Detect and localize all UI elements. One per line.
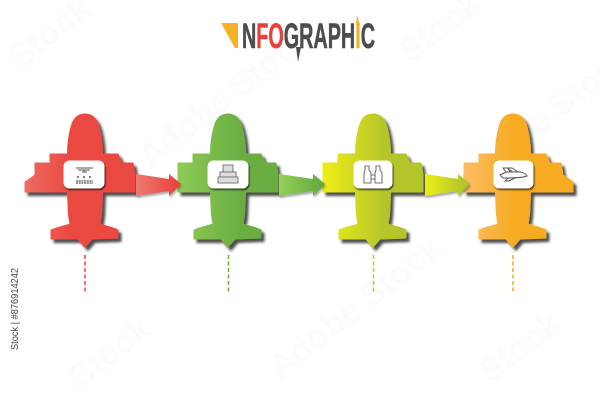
icon: crane and boxes: [76, 168, 93, 183]
dashed leader line: [512, 255, 514, 292]
icon: stacked boxes: [218, 165, 238, 183]
icon card: [354, 160, 392, 188]
stock image number: Stock | #876914242: [10, 268, 21, 350]
icon card: [494, 160, 534, 188]
plane body: [25, 114, 135, 247]
icon card: [208, 160, 248, 188]
watermark: Stock: [62, 309, 158, 396]
logo mark: yellow wedge forming the letter I: [221, 23, 238, 48]
dashed leader line: [228, 255, 230, 293]
title: INFOGRAPHIC logo: [221, 15, 375, 62]
logo text: NFOGRAPHIC: [242, 17, 375, 56]
plane 3: yellow-green: [323, 114, 423, 293]
watermark: Adobe Stock: [262, 228, 449, 386]
dashed leader line: [84, 255, 86, 293]
icon card: [64, 160, 104, 188]
plane body: [464, 114, 573, 247]
watermark: Stock: [472, 304, 568, 391]
R spike: [296, 47, 301, 62]
watermark: Adobe Stock: [132, 18, 319, 176]
arrow 3: yellow to orange: [425, 174, 470, 196]
plane 4: orange: [464, 114, 573, 292]
plane 1: red: [25, 114, 135, 293]
plane 2: green: [178, 114, 278, 293]
arrow 1: red to green: [136, 174, 181, 196]
icon: binoculars: [364, 166, 382, 183]
plane body: [323, 114, 423, 247]
plane body: [178, 114, 278, 247]
icon: airplane: [500, 168, 527, 181]
arrow 2: green to yellow: [279, 174, 325, 196]
I spike: [356, 15, 360, 25]
dashed leader line: [372, 255, 374, 293]
